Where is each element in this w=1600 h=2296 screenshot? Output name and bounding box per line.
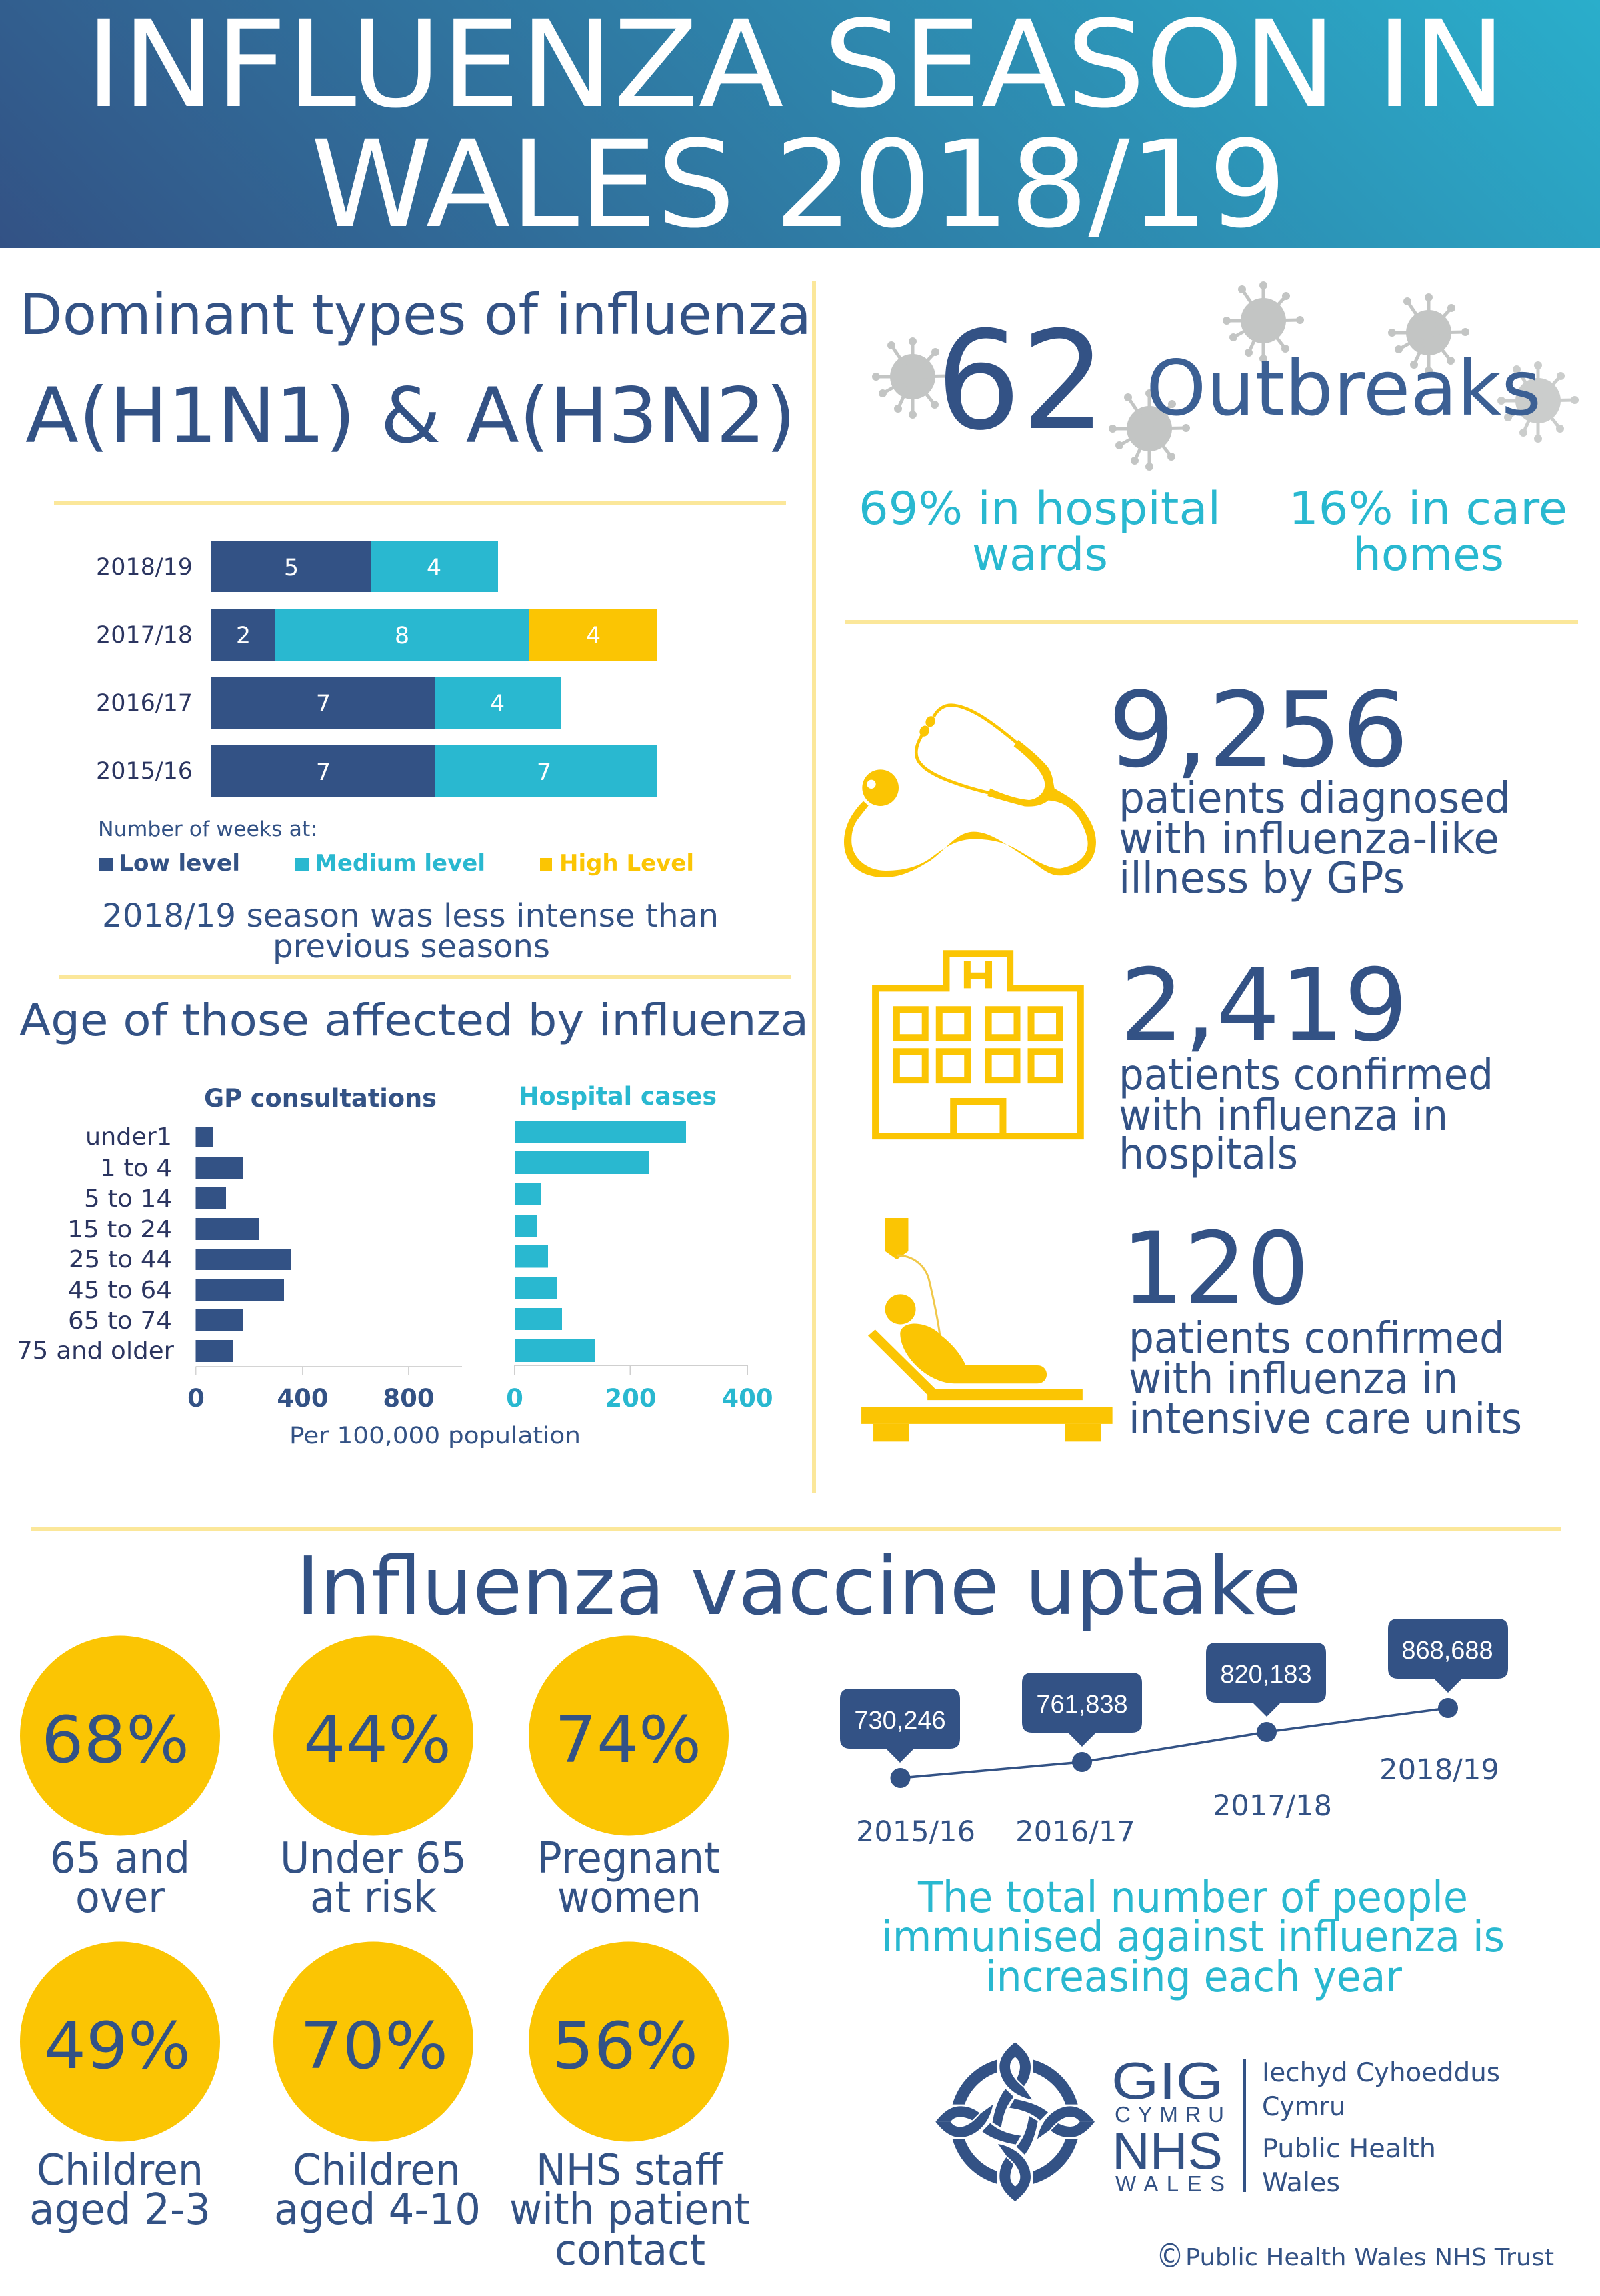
organisation names: Iechyd Cyhoeddus: [1262, 2058, 1500, 2088]
strain names: A(H1N1) & A(H3N2): [25, 371, 796, 460]
heading: age of those affected: Age of those affected by influenza: [19, 995, 809, 1046]
circle: children aged 4-10: Children: [293, 2146, 461, 2195]
bar 2017/18: 2017/18: [96, 622, 193, 649]
chart: GP consultations: 800: [383, 1384, 435, 1413]
circle: pregnant women: [529, 1636, 729, 1923]
stat: care homes: homes: [1353, 529, 1504, 581]
description: GP diagnoses: illness by GPs: [1119, 854, 1405, 903]
legend: [98, 817, 694, 877]
bar 2015/16: 7: [537, 759, 551, 786]
summary: people immunised: The total number of people: [917, 1873, 1468, 1923]
year labels: 2016/17: [1015, 1815, 1135, 1849]
description: intensive care: intensive care units: [1129, 1395, 1522, 1444]
circle: NHS staff: NHS staff: [536, 2146, 724, 2195]
age group labels: 75 and older: [17, 1337, 174, 1365]
bar 2017/18: 4: [586, 623, 601, 649]
icon: patient in bed: [861, 1218, 1113, 1441]
callout 2017/18: 820,183: [1220, 1661, 1312, 1689]
stat: care homes: [1289, 483, 1567, 581]
bar 2018/19: 2018/19: [96, 554, 193, 581]
description: GP diagnoses: [1119, 774, 1511, 903]
wordmark: GIG Cymru NHS Wales: [1111, 2051, 1225, 2196]
season summary text: 2018/19 season was less intense than: [102, 897, 719, 935]
age group labels: under1: [85, 1123, 172, 1151]
bar 2017/18: 8: [395, 623, 409, 649]
description: intensive care: with influenza in: [1129, 1355, 1458, 1404]
description: GP diagnoses: with influenza-like: [1119, 815, 1499, 864]
year labels: [856, 1753, 1499, 1849]
title: WALES 2018/19: [311, 115, 1287, 255]
stacked bar chart: [96, 541, 657, 797]
bar 2017/18: [96, 609, 657, 661]
season summary text: [102, 897, 719, 965]
circle: children aged 2-3: Children: [37, 2146, 203, 2195]
chart: GP consultations: 0: [187, 1384, 205, 1413]
callout 2018/19: 868,688: [1401, 1637, 1493, 1665]
chart: hospital cases: 0: [506, 1384, 523, 1413]
description: intensive care: [1129, 1314, 1522, 1444]
bar 2018/19: 5: [284, 555, 299, 581]
season summary text: previous seasons: [273, 928, 550, 965]
circle: under 65 at risk: at risk: [310, 1873, 437, 1923]
year labels: 2017/18: [1213, 1789, 1332, 1823]
age group labels: 65 to 74: [68, 1307, 172, 1335]
year labels: 2018/19: [1379, 1753, 1499, 1787]
icon: stethoscope: [844, 705, 1096, 877]
icon: celtic knot: [935, 2042, 1095, 2201]
panel: intensive care: [861, 1211, 1522, 1444]
description: intensive care: patients confirmed: [1129, 1314, 1505, 1363]
circle: NHS staff: 56%: [552, 2009, 698, 2083]
bar 2018/19: [96, 541, 498, 592]
copyright: [1156, 2237, 1554, 2275]
callout 2016/17: [1022, 1673, 1142, 1747]
heading: dominant types: Dominant types of influenza: [19, 282, 811, 347]
panel: GP diagnoses: [844, 669, 1511, 903]
legend: High Level: [559, 850, 694, 877]
panel: dominant types of influenza: [19, 282, 811, 460]
age group labels: 15 to 24: [67, 1216, 172, 1243]
stat: 120: 120: [1121, 1211, 1309, 1327]
panel: age of those affected: [17, 995, 809, 1449]
circle: children aged 4-10: 70%: [300, 2009, 448, 2083]
bar 2015/16: [96, 745, 657, 797]
copyright: Public Health Wales NHS Trust: [1185, 2244, 1554, 2271]
stat: hospital wards: 69% in hospital: [859, 483, 1221, 535]
stat: care homes: 16% in care: [1289, 483, 1567, 535]
description: GP diagnoses: patients diagnosed: [1119, 774, 1511, 823]
bar 2018/19: 4: [427, 555, 441, 581]
panel: uptake by group: [20, 1636, 750, 2275]
age group labels: 5 to 14: [84, 1185, 172, 1213]
chart: GP consultations: [187, 1084, 462, 1413]
outbreaks label: Outbreaks: [1146, 344, 1541, 433]
stat: hospital wards: [859, 483, 1221, 581]
chart: hospital cases: 200: [605, 1384, 657, 1413]
stat: hospital wards: wards: [972, 529, 1108, 581]
circle: pregnant women: women: [557, 1873, 701, 1923]
circle: under 65 at risk: Under 65: [280, 1834, 467, 1883]
circle: NHS staff: with patient: [509, 2185, 750, 2235]
panel: hospital cases: [875, 948, 1493, 1179]
copyright: ©: [1156, 2237, 1184, 2275]
line chart: people immunised: [840, 1619, 1508, 1849]
circle: 65 and over: 68%: [41, 1703, 189, 1777]
chart: GP consultations: GP consultations: [204, 1084, 437, 1113]
callout 2015/16: 730,246: [854, 1707, 946, 1735]
age group labels: 45 to 64: [68, 1277, 172, 1304]
panel: weeks at each activity level: [96, 541, 719, 965]
callout 2016/17: 761,838: [1036, 1691, 1128, 1719]
bar 2016/17: [96, 677, 561, 729]
circle: 65 and over: 65 and: [50, 1834, 190, 1883]
circle: children aged 4-10: aged 4-10: [274, 2185, 481, 2235]
description: hospital cases: hospitals: [1119, 1130, 1298, 1179]
callout 2018/19: [1388, 1619, 1508, 1693]
organisation names: Cymru: [1262, 2092, 1345, 2122]
description: hospital cases: [1119, 1051, 1493, 1179]
chart: hospital cases: [506, 1082, 773, 1413]
chart: hospital cases: Hospital cases: [519, 1082, 717, 1111]
age group labels: 1 to 4: [100, 1155, 172, 1182]
wordmark: GIG Cymru NHS Wales: GIG: [1111, 2051, 1223, 2110]
age group labels: [17, 1123, 174, 1365]
circle: children aged 2-3: 49%: [44, 2009, 191, 2083]
axis caption: Per 100,000 population: [289, 1423, 581, 1449]
circle: 65 and over: over: [75, 1873, 165, 1923]
wordmark: GIG Cymru NHS Wales: WALES: [1115, 2171, 1225, 2196]
circle: children aged 4-10: [273, 1941, 481, 2235]
organisation names: Public Health: [1262, 2134, 1436, 2164]
panel: total immunised: [840, 1619, 1508, 2002]
icon: hospital: [875, 953, 1081, 1136]
circle: NHS staff: [509, 1941, 750, 2275]
description: hospital cases: patients confirmed: [1119, 1051, 1493, 1100]
summary: people immunised: immunised against influenza is: [881, 1913, 1505, 1962]
chart: GP consultations: 400: [277, 1384, 329, 1413]
legend: Medium level: [315, 850, 485, 877]
icons: viruses: [876, 285, 1575, 467]
circle: children aged 2-3: aged 2-3: [29, 2185, 211, 2235]
stat: 2,419: 2,419: [1120, 948, 1408, 1064]
circle: pregnant women: Pregnant: [537, 1834, 720, 1883]
description: hospital cases: with influenza in: [1119, 1091, 1448, 1141]
bar 2015/16: 2015/16: [96, 758, 193, 785]
summary: people immunised: [881, 1873, 1505, 2002]
wordmark: GIG Cymru NHS Wales: NHS: [1112, 2121, 1223, 2180]
circle: children aged 2-3: [20, 1941, 220, 2235]
heading: vaccine uptake: Influenza vaccine uptake: [296, 1541, 1301, 1633]
legend: Low level: [119, 850, 240, 877]
circle: under 65 at risk: [273, 1636, 473, 1923]
header banner: [0, 0, 1600, 255]
circle: pregnant women: 74%: [555, 1703, 701, 1777]
circle: NHS staff: contact: [555, 2226, 705, 2275]
summary: people immunised: increasing each year: [985, 1953, 1403, 2002]
circle: 65 and over: [20, 1636, 220, 1923]
wordmark: GIG Cymru NHS Wales: CYMRU: [1115, 2102, 1224, 2127]
panel: outbreaks: [859, 285, 1575, 581]
organisation names: [1262, 2058, 1500, 2198]
year labels: 2015/16: [856, 1815, 975, 1849]
title: [85, 0, 1506, 255]
callout 2015/16: [840, 1689, 960, 1763]
bar 2016/17: 4: [490, 691, 505, 717]
bar 2017/18: 2: [236, 623, 251, 649]
chart: hospital cases: 400: [721, 1384, 773, 1413]
age group labels: 25 to 44: [69, 1246, 172, 1273]
stat: 9,256: 9,256: [1108, 669, 1409, 791]
circle: under 65 at risk: 44%: [303, 1703, 451, 1777]
bar 2016/17: 7: [316, 691, 331, 717]
organisation names: Wales: [1262, 2168, 1340, 2198]
bar 2015/16: 7: [316, 759, 331, 786]
number of outbreaks: 62: [936, 303, 1106, 461]
legend: Number of weeks at:: [98, 817, 317, 841]
bar 2016/17: 2016/17: [96, 690, 193, 717]
logo: Public Health Wales: [935, 2042, 1500, 2201]
callout 2017/18: [1206, 1643, 1326, 1717]
